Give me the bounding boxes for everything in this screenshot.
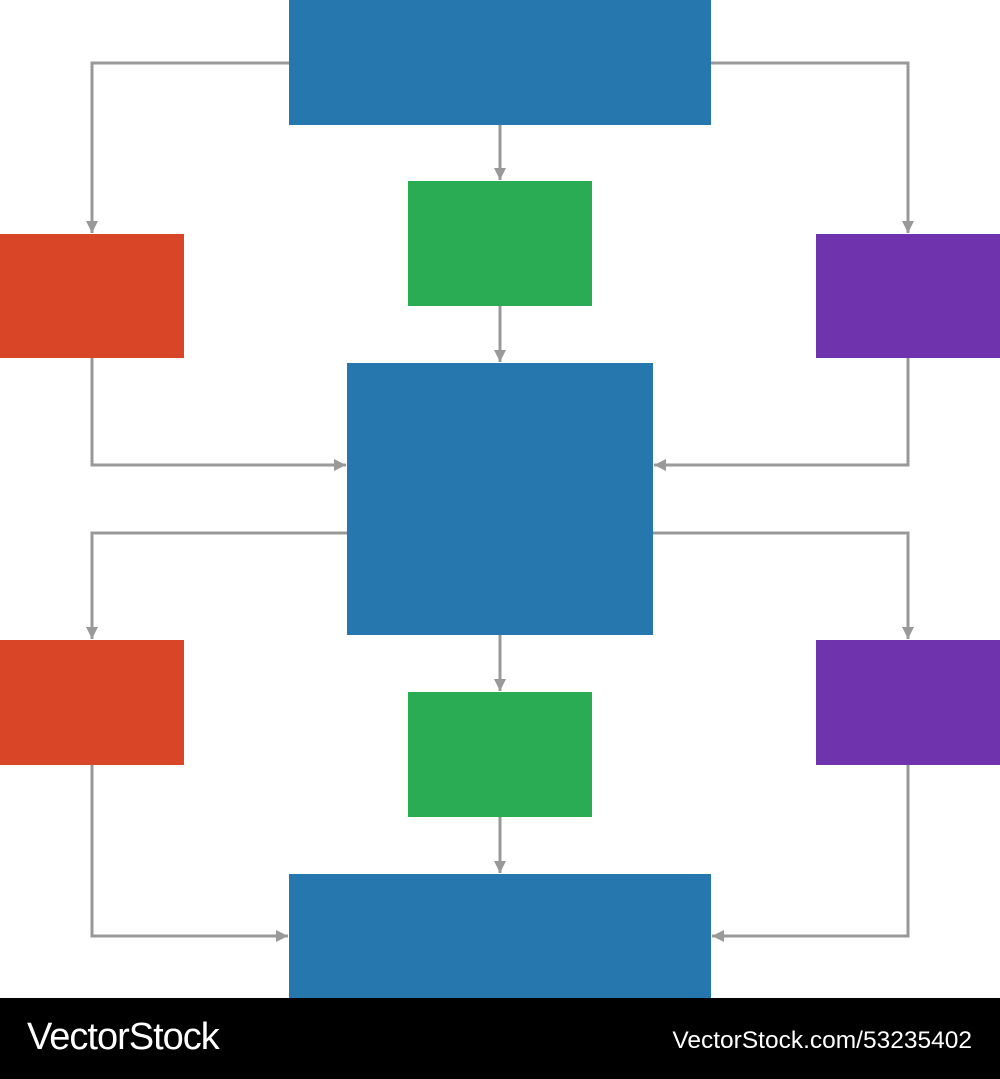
arrow: top to red1	[92, 63, 289, 233]
box: bottom blue	[289, 874, 711, 998]
arrow: center to purple2	[653, 533, 908, 639]
box: purple 1	[816, 234, 1000, 358]
footer bar	[0, 998, 1000, 1079]
arrow: green2 to bottom	[498, 817, 502, 873]
arrow: purple1 to center	[654, 358, 908, 465]
box: red 2	[0, 640, 184, 765]
arrow: center to red2	[92, 533, 347, 639]
box: green 2	[408, 692, 592, 817]
box: purple 2	[816, 640, 1000, 765]
arrow: purple2 to bottom	[712, 765, 908, 936]
footer logo: VectorStock	[27, 1016, 219, 1058]
box: top blue	[289, 0, 711, 125]
arrow: red1 to center	[92, 358, 346, 465]
arrow: top to green1	[498, 125, 502, 180]
box: red 1	[0, 234, 184, 358]
arrow: center to green2	[498, 635, 502, 691]
box: center blue	[347, 363, 653, 635]
arrow: red2 to bottom	[92, 765, 288, 936]
arrows	[92, 63, 908, 936]
arrow: top to purple1	[711, 63, 908, 233]
footer url: VectorStock.com/53235402	[672, 1027, 972, 1054]
box: green 1	[408, 181, 592, 306]
arrow: green1 to center	[498, 306, 502, 362]
